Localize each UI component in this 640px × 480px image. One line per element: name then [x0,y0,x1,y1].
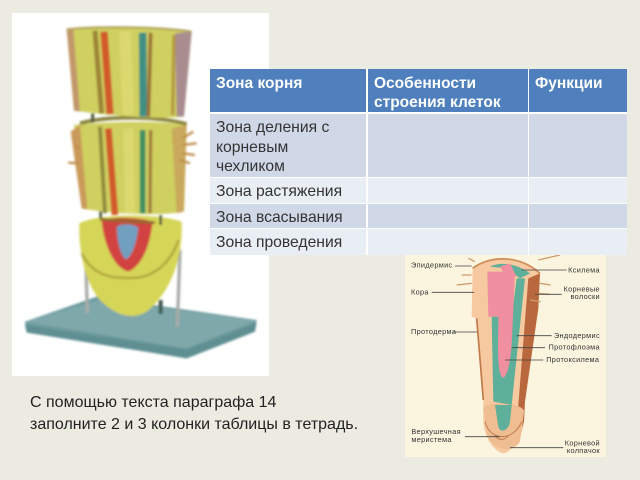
diagram labels: Протоксилема [546,355,600,364]
root body [457,255,560,453]
diagram labels [411,261,601,455]
table [210,69,627,255]
diagram: root longitudinal section [405,255,606,457]
table row: conduction zone: Зона проведения [216,234,342,251]
diagram labels: Корневой [565,438,600,447]
model bottom section: root cap [79,207,182,327]
model base [25,297,257,358]
diagram labels: Корневые [564,285,600,294]
model middle section [68,113,197,215]
table row: conduction zone [210,229,627,255]
diagram labels: волоски [571,292,600,301]
instruction text: заполните 2 и 3 колонки таблицы в тетрадь. [30,416,358,433]
table row: division zone [210,114,627,177]
table row: elongation zone [210,178,627,203]
table row: absorption zone [210,204,627,228]
diagram labels: Эндодермис [554,331,600,340]
instruction text [30,394,358,433]
diagram labels: Кора [411,287,429,296]
table header: Зона корня [216,75,302,92]
diagram labels: Ксилема [568,265,601,274]
table header: Особенности [374,75,476,92]
table header: строения клеток [374,94,501,111]
diagram labels: Верхушечная [411,427,461,436]
photo: root model [12,13,269,376]
table header [210,69,627,112]
table header: Функции [535,75,603,92]
callout lines [432,266,567,448]
diagram labels: колпачок [567,446,600,455]
diagram labels: меристема [411,435,452,444]
diagram labels: Протодерма [411,327,457,336]
table row: elongation zone: Зона растяжения [216,183,342,200]
table row: division zone: чехликом [216,158,285,175]
table row: absorption zone: Зона всасывания [216,209,343,226]
instruction text: С помощью текста параграфа 14 [30,394,277,411]
diagram labels: Эпидермис [411,261,453,270]
model top section [67,27,192,118]
table backing [210,69,627,255]
table row: division zone: Зона деления с [216,119,329,136]
diagram labels: Протофлоэма [549,343,601,352]
table row: division zone: корневым [216,139,288,156]
